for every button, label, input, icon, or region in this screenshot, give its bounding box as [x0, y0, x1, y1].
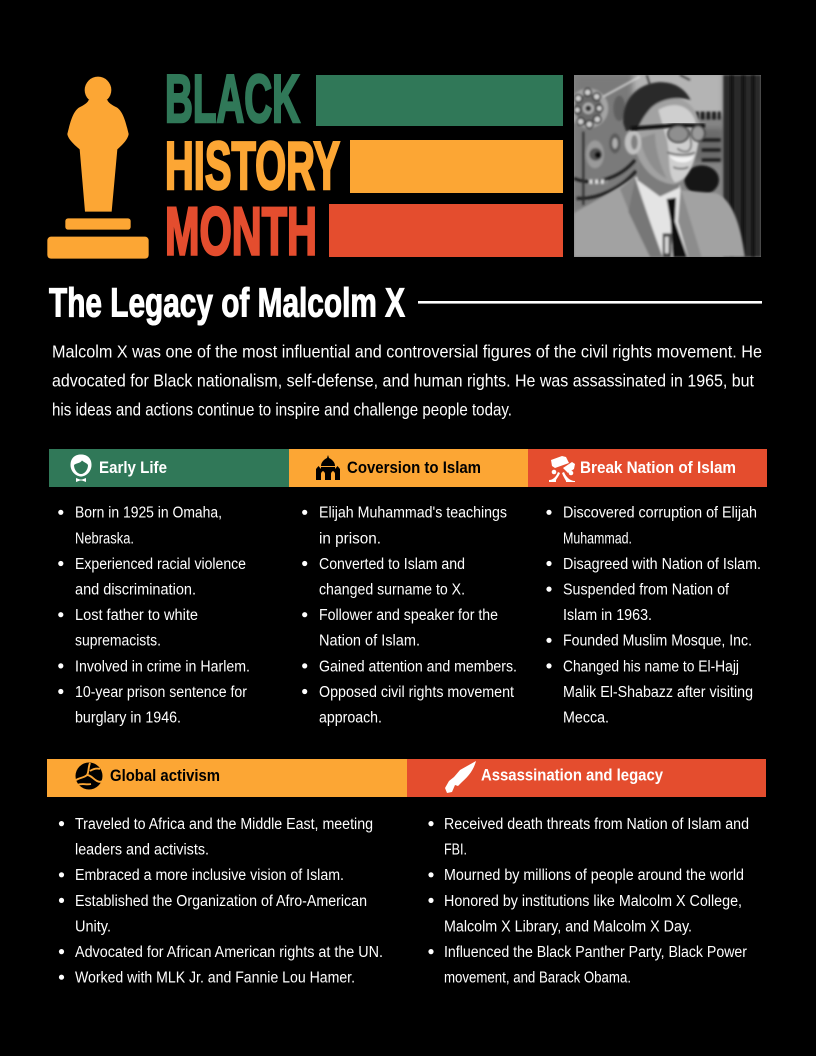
bullet list: approach.: [319, 710, 382, 726]
panel: Break Nation of Islam: [528, 449, 767, 726]
bullet list: Changed his name to El-Hajj: [563, 658, 739, 675]
header bar: Break Nation of Islam: [528, 449, 767, 487]
bullet list: Influenced the Black Panther Party, Black Power: [444, 944, 747, 961]
bullet list: Born in 1925 in Omaha,: [75, 505, 222, 522]
header bar: Assassination and legacy: [407, 759, 766, 797]
bullet list: Follower and speaker for the: [319, 607, 498, 624]
hair: [623, 82, 691, 131]
bullet list: Traveled to Africa and the Middle East, meeting: [75, 816, 373, 833]
bullet list: [58, 505, 250, 726]
bullet list: changed surname to X.: [319, 582, 465, 598]
title word: BLACK: BLACK: [165, 61, 300, 137]
bullet list: and discrimination.: [75, 582, 196, 598]
bullet list: Honored by institutions like Malcolm X College,: [444, 893, 742, 910]
bullet list: Elijah Muhammad's teachings: [319, 505, 507, 522]
header label: Break Nation of Islam: [580, 459, 736, 477]
header bar: Coversion to Islam: [289, 449, 528, 487]
intro paragraph: advocated for Black nationalism, self-defense, and human rights. He was assassinated in 1965, but: [52, 371, 754, 391]
bullet list: [59, 816, 383, 987]
teeth: [669, 156, 694, 162]
bullet list: Converted to Islam and: [319, 556, 465, 573]
mural detail: [568, 75, 721, 205]
panel: Early Life: [49, 449, 289, 726]
bullet list: Nation of Islam.: [319, 633, 420, 650]
bullet list: Worked with MLK Jr. and Fannie Lou Hamer.: [75, 970, 355, 987]
bullet list: Mecca.: [563, 710, 609, 726]
icon: globe with cracks: [76, 762, 102, 790]
bullet list: Malcolm X Library, and Malcolm X Day.: [444, 918, 692, 935]
bullet list: Lost father to white: [75, 607, 198, 624]
face: [632, 96, 699, 184]
photo: portrait of Malcolm X: [568, 72, 761, 257]
bullet list: Mourned by millions of people around the world: [444, 867, 744, 884]
neck: [637, 162, 679, 197]
panel: Coversion to Islam: [289, 449, 528, 726]
icon: mosque: [316, 455, 340, 480]
nose and cheek shade: [677, 128, 691, 152]
bullet list: 10-year prison sentence for: [75, 684, 247, 701]
bullet list: [428, 816, 749, 987]
bullet list: Unity.: [75, 918, 111, 935]
bullet list: Founded Muslim Mosque, Inc.: [563, 633, 752, 650]
header bar: Global activism: [47, 759, 407, 797]
bullet list: Involved in crime in Harlem.: [75, 658, 250, 675]
bullet list: Disagreed with Nation of Islam.: [563, 556, 761, 573]
bullet list: Advocated for African American rights at the UN.: [75, 944, 383, 961]
bullet list: Opposed civil rights movement: [319, 684, 515, 701]
bullet list: Experienced racial violence: [75, 556, 246, 573]
bullet list: Received death threats from Nation of Islam and: [444, 816, 749, 833]
ear: [625, 130, 641, 155]
bullet list: Suspended from Nation of: [563, 582, 730, 598]
bullet list: FBI.: [444, 842, 467, 859]
bullet list: movement, and Barack Obama.: [444, 970, 631, 987]
panel: Assassination and legacy: [407, 759, 766, 987]
intro paragraph: [52, 342, 762, 420]
curtain: [723, 75, 761, 257]
bullet list: Gained attention and members.: [319, 658, 517, 675]
header label: Global activism: [110, 767, 220, 785]
bullet list: Discovered corruption of Elijah: [563, 505, 757, 522]
green bar: [316, 75, 563, 126]
heading rule: [418, 301, 762, 304]
header label: Assassination and legacy: [481, 766, 664, 784]
bullet list: supremacists.: [75, 633, 161, 650]
bullet list: leaders and activists.: [75, 842, 209, 859]
intro paragraph: his ideas and actions continue to inspire and challenge people today.: [52, 400, 512, 420]
header label: Early Life: [99, 459, 167, 477]
icon: knife: [445, 761, 476, 793]
red bar: [329, 204, 563, 257]
header bar: Early Life: [49, 449, 289, 487]
icon: boy face: [70, 454, 92, 482]
icon: statue on pedestal: [47, 77, 149, 259]
intro paragraph: Malcolm X was one of the most influential and controversial figures of the civil rights movement. He: [52, 342, 762, 362]
glasses: [631, 125, 705, 142]
orange bar: [350, 140, 563, 193]
heading text: The Legacy of Malcolm X: [49, 280, 405, 326]
bullet list: burglary in 1946.: [75, 710, 181, 726]
bullet list: Islam in 1963.: [563, 607, 652, 624]
icon: breaking apart: [549, 456, 575, 482]
bullet list: Established the Organization of Afro-American: [75, 893, 367, 910]
title word: HISTORY: HISTORY: [165, 128, 340, 204]
bullet list: [302, 505, 517, 726]
panel: Global activism: [47, 759, 407, 987]
header label: Coversion to Islam: [347, 459, 481, 477]
bullet list: [546, 505, 761, 726]
header banner: [47, 61, 563, 270]
bullet list: Embraced a more inclusive vision of Islam.: [75, 867, 344, 884]
bullet list: Malik El-Shabazz after visiting: [563, 684, 753, 701]
bullet list: Muhammad.: [563, 530, 632, 547]
bullet list: in prison.: [319, 530, 381, 547]
title word: MONTH: MONTH: [165, 194, 317, 270]
jacket: [574, 82, 745, 257]
bullet list: Nebraska.: [75, 530, 134, 547]
